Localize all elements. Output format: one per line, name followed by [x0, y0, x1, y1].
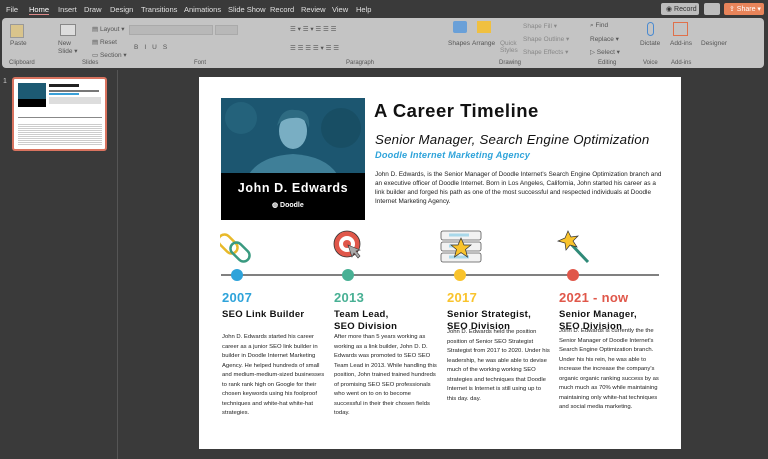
ribbon: Shape Outline ▾ [523, 36, 569, 43]
share button: ⇪ Share ▾ [729, 6, 761, 13]
ribbon: Shape Effects ▾ [523, 49, 568, 56]
ribbon: Slide ▾ [58, 48, 78, 55]
column 2013: Team Lead, [334, 309, 389, 320]
ribbon: Slides [82, 60, 98, 66]
icon: magic wand [557, 230, 589, 263]
column 2021 [559, 290, 659, 410]
column 2017: 2017 [447, 290, 477, 305]
ribbon: ⌕ Find [590, 22, 608, 29]
column 2007: John D. Edwards started his career career as a junior SEO link builder in builder in Doodle Internet Marketing Agency. He helped hundreds of small and medium-medium-sized businesses to rank rank high on Google for their chosen keywords using his foolproof techniques and white-hat white-hat strategies. [222, 334, 324, 416]
timeline line [221, 274, 659, 276]
menu tabs bar: Animations [184, 5, 221, 14]
ribbon: Paragraph [346, 60, 374, 66]
ribbon: ▷ Select ▾ [590, 49, 620, 56]
ribbon: Add-ins [670, 40, 692, 47]
column 2013: SEO Division [334, 321, 397, 332]
icon: target [334, 230, 361, 258]
menu tabs bar [0, 0, 768, 18]
menu tabs bar: Insert [58, 5, 77, 14]
ribbon: Clipboard [9, 60, 35, 66]
menu tabs bar: File [6, 5, 18, 14]
column 2007: 2007 [222, 290, 252, 305]
ribbon: Voice [643, 60, 658, 66]
agency: Doodle Internet Marketing Agency [375, 150, 530, 160]
menu tabs bar: Home [29, 5, 49, 14]
ribbon: New [58, 40, 71, 47]
record button: ◉ Record [666, 6, 697, 13]
column 2013: 2013 [334, 290, 364, 305]
menu tabs bar: Draw [84, 5, 102, 14]
slide [199, 77, 681, 449]
column 2021: 2021 - now [559, 290, 628, 305]
menu tabs bar: Design [110, 5, 133, 14]
column 2013 [334, 290, 437, 416]
ribbon: Shapes [448, 40, 470, 47]
column 2017: Senior Strategist, [447, 309, 531, 320]
column 2021: SEO Division [559, 321, 622, 332]
ribbon: Drawing [499, 60, 521, 66]
column 2007 [222, 290, 324, 416]
ribbon: BIUS [134, 44, 173, 51]
menu tabs bar: View [332, 5, 348, 14]
title: A Career Timeline [374, 100, 539, 121]
record button [661, 3, 699, 15]
icon: chain link [220, 233, 251, 263]
column 2013: After more than 5 years working as working as a link builder, John D. D. Edwards was promoted to SEO SEO Team Lead in 2013. While handling this position, John trained trained hundreds of promising SEO SEO professionals who went on to on to become successful in their their chosen fields today. [334, 334, 437, 416]
column 2007: SEO Link Builder [222, 309, 304, 320]
text: 1 [3, 78, 7, 85]
column 2017: SEO Division [447, 321, 510, 332]
ribbon: ▤ Reset [92, 39, 117, 46]
thumbnail pane divider [117, 70, 118, 459]
name: John D. Edwards [238, 181, 348, 195]
ribbon: Font [194, 60, 206, 66]
ribbon: Paste [10, 40, 27, 47]
doodle logo: ◍ Doodle [272, 202, 304, 209]
subtitle: Senior Manager, Search Engine Optimization [375, 132, 650, 147]
menu tabs bar: Review [301, 5, 326, 14]
ribbon: Styles [500, 47, 518, 54]
ribbon: Quick [500, 40, 517, 47]
menu tabs bar: Help [356, 5, 371, 14]
dots [231, 269, 243, 281]
ribbon: Dictate [640, 40, 660, 47]
profile photo card [221, 98, 365, 220]
intro paragraph: John D. Edwards, is the Senior Manager of Doodle Internet's Search Engine Optimization branch and an executive officer of Doodle Internet. Born in Los Angeles, California, John started his career as a link builder and forged his path as one of the most successful and respected individuals at Doodle Internet Marketing Agency. [375, 171, 661, 205]
ribbon: ▤ Layout ▾ [92, 26, 125, 33]
ribbon: ☰ ☰ ☰ ☰ ▾ ☰ ☰ [290, 45, 339, 52]
column 2021: Senior Manager, [559, 309, 637, 320]
menu tabs bar: Slide Show [228, 5, 266, 14]
ribbon: Replace ▾ [590, 36, 619, 43]
ribbon: Designer [701, 40, 727, 47]
column 2021: John D. Edwards is currently the the Senior Manager of Doodle Internet's Search Engine Optimization branch. Under his his rein, he was able to increase the increase the company's organic organic ranking success by as much much as 70% while maintaining maintaining only white-hat techniques and social media marketing. [559, 328, 659, 410]
ribbon: ☰ ▾ ☰ ▾ ☰ ☰ ☰ [290, 26, 336, 33]
slide thumbnail [12, 77, 107, 151]
ribbon [2, 18, 764, 68]
icon: servers with star [440, 230, 482, 262]
menu tabs bar: Record [270, 5, 294, 14]
ribbon: Add-ins [671, 60, 691, 66]
ribbon: Editing [598, 60, 616, 66]
ribbon: Shape Fill ▾ [523, 23, 557, 30]
menu tabs bar: Transitions [141, 5, 177, 14]
ribbon: ▭ Section ▾ [92, 52, 127, 59]
photo: person silhouette [226, 102, 361, 173]
ribbon: Arrange [472, 40, 495, 47]
column 2017: John D. Edwards held the position position of Senior SEO Strategist Strategist from 2017 to 2020. Under his leadership, he was able able to devise much of the working working SEO strategies and techniques that Doodle Internet is Internet is still using up to this day. day. [447, 329, 550, 402]
share button [724, 3, 764, 15]
column 2017 [447, 290, 550, 402]
